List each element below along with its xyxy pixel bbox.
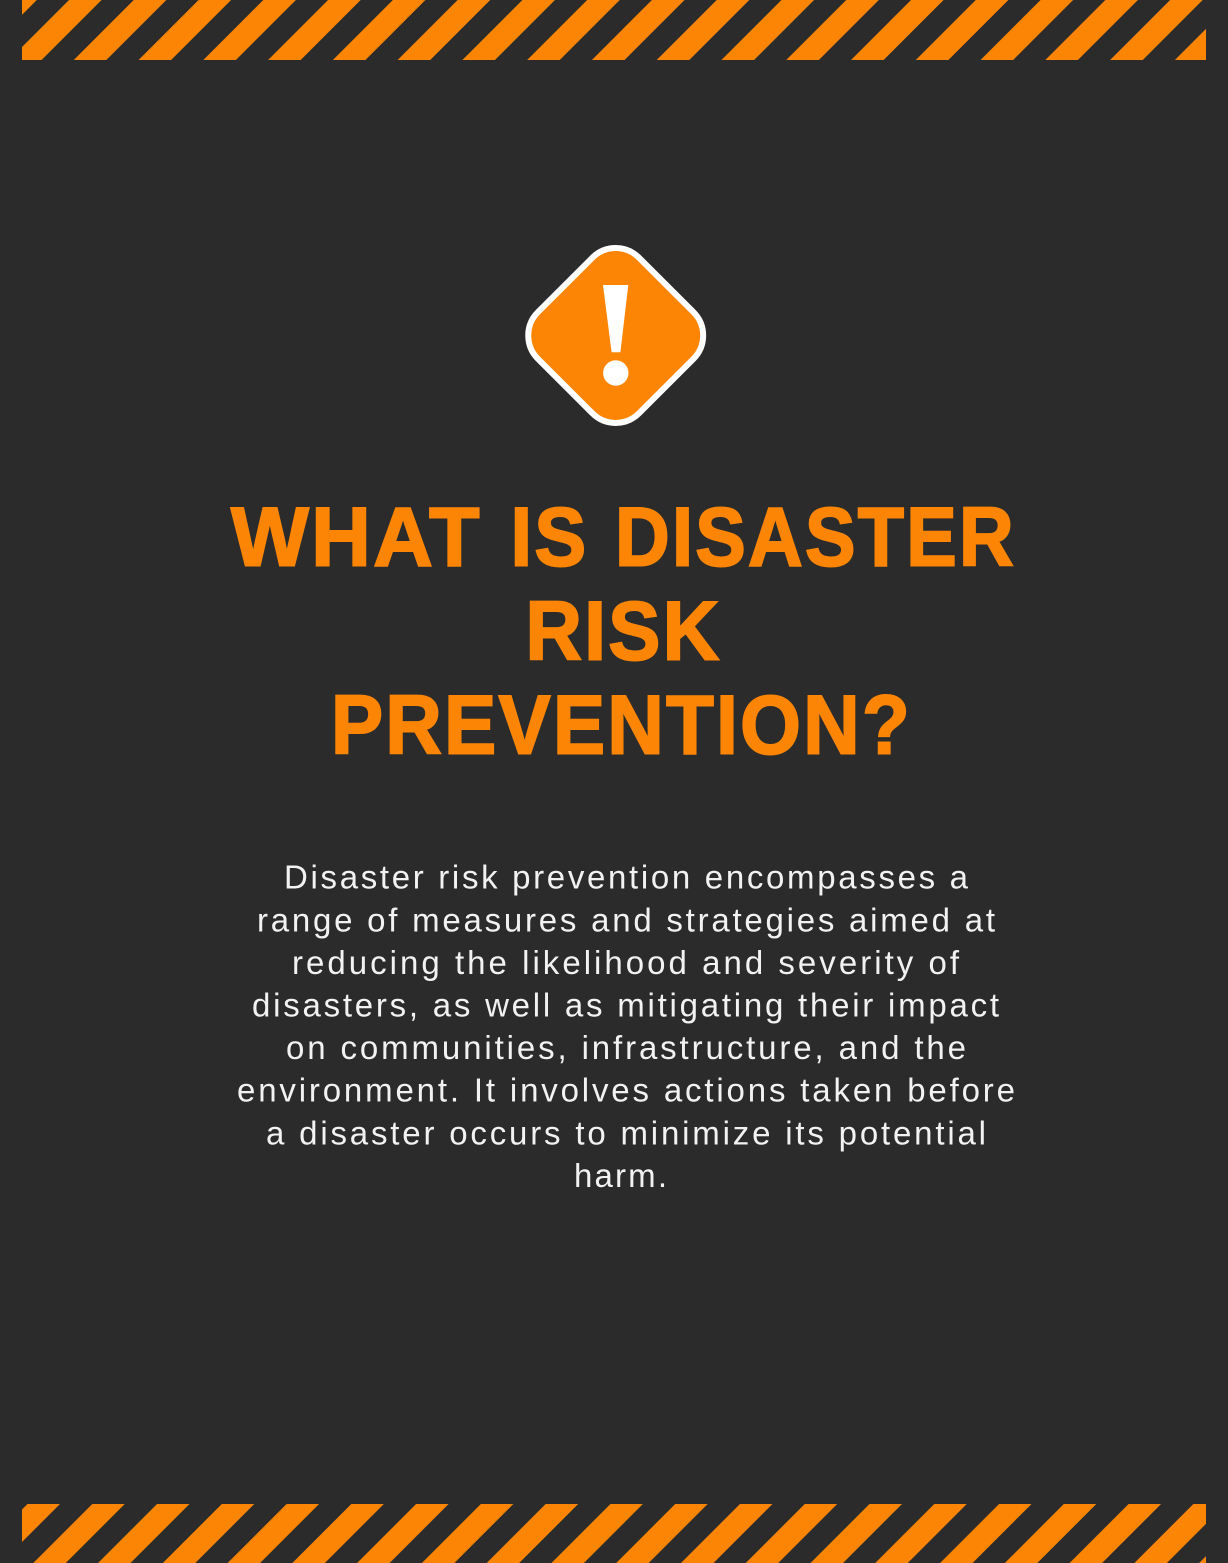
title: RISK	[526, 584, 722, 678]
body text block: range of measures and strategies aimed at	[257, 901, 995, 938]
body text block: a disaster occurs to minimize its potential	[266, 1114, 986, 1151]
title	[231, 490, 1016, 772]
bottom hazard stripe band	[0, 1504, 1228, 1563]
body text block: harm.	[574, 1157, 667, 1194]
body text block: environment. It involves actions taken before	[237, 1072, 1015, 1109]
body text block: reducing the likelihood and severity of	[292, 944, 960, 981]
title: DISASTER	[615, 490, 1016, 584]
body text block	[237, 859, 1015, 1194]
body text block: disasters, as well as mitigating their impact	[252, 986, 999, 1024]
title: IS	[510, 490, 588, 584]
body text block: Disaster risk prevention encompasses a	[284, 859, 969, 896]
body text block: on communities, infrastructure, and the	[286, 1029, 966, 1066]
icon: warning diamond with exclamation mark	[515, 234, 717, 437]
title: PREVENTION?	[331, 678, 912, 772]
title: WHAT	[231, 490, 482, 584]
top hazard stripe band	[0, 0, 1228, 60]
